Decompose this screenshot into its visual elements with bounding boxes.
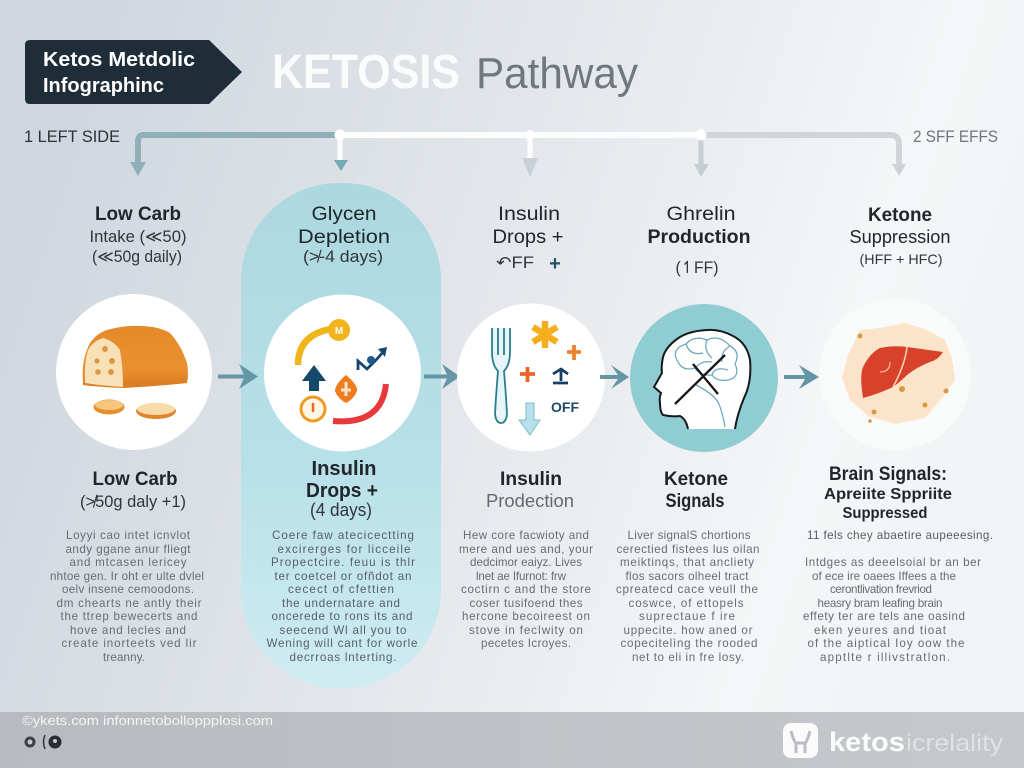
text block: column 4: meiktinqs, that ancliety bbox=[620, 556, 754, 569]
column 1 lower heading: (≯50g daly +1) bbox=[80, 493, 186, 511]
column 3 top heading: Insulin bbox=[498, 204, 560, 225]
text block: column 1: the ttrep bewecerts and bbox=[60, 610, 198, 623]
column 3 top heading: ↶FF bbox=[496, 254, 534, 272]
text block: column 5: apptlte r illivstratlon. bbox=[820, 651, 950, 664]
column 2 lower heading: Drops + bbox=[306, 480, 378, 502]
text block: column 4: copecitelìng the rooded bbox=[620, 637, 758, 650]
column 1 top heading: Low Carb bbox=[95, 204, 181, 225]
column 3 top heading: + bbox=[549, 253, 561, 275]
title: KETOSIS bbox=[272, 46, 460, 99]
icon: metabolic symbols in white circle: M bbox=[335, 326, 343, 337]
column 2 top heading bbox=[298, 204, 390, 266]
text block: column 2: Wening will cant for worle bbox=[266, 637, 418, 650]
column 5 top heading: (HFF + HFC) bbox=[860, 251, 942, 267]
badge: infographic label: Infographinc bbox=[43, 75, 164, 97]
text block: column 5: of ece ire oaees Iffees a the bbox=[812, 570, 956, 583]
arrow bbox=[600, 365, 629, 389]
column 1 top heading bbox=[90, 204, 186, 266]
column 5 top heading: Suppression bbox=[850, 227, 950, 247]
icon: fork and off symbols in white circle bbox=[457, 304, 605, 452]
text block: column 4: cerectied fistees lus oilan bbox=[616, 543, 760, 556]
icon: bread in white circle bbox=[56, 294, 212, 450]
text block: column 1: andy ggane anur fliegt bbox=[66, 543, 191, 556]
column 5 top heading bbox=[850, 205, 950, 267]
text block: column 1: treanny. bbox=[103, 651, 145, 664]
icon: metabolic symbols in white circle bbox=[264, 294, 421, 452]
column 4 top heading: (↿FF) bbox=[676, 259, 718, 277]
column 5 lower heading bbox=[824, 464, 952, 522]
text block: column 5: 11 fels chey abaetire aupeeesing. bbox=[807, 529, 993, 542]
footer logo bbox=[783, 723, 1003, 758]
icon: liver on peach blob in white circle bbox=[819, 298, 971, 450]
text block: column 1: nhtoe gen. Ir oht er ulte dvlel bbox=[50, 570, 204, 583]
text block: column 5: eken yeures and tioat bbox=[814, 624, 947, 637]
footer logo: ketos bbox=[829, 727, 905, 757]
text block: column 2: the undernatare and bbox=[282, 597, 400, 610]
column 5 lower heading: Brain Signals: bbox=[829, 464, 947, 485]
text block: column 3: dedcimor eaiyz. Lives bbox=[470, 556, 582, 569]
title bbox=[272, 46, 638, 99]
text block: column 1: Loyyi cao intet icnvlot bbox=[66, 529, 191, 542]
footer bar bbox=[0, 712, 1024, 768]
text block: column 5 bbox=[803, 529, 993, 664]
text block: column 3 bbox=[459, 529, 593, 650]
column 5 top heading: Ketone bbox=[868, 205, 932, 226]
title: Pathway bbox=[476, 49, 638, 98]
arrow bbox=[784, 365, 819, 389]
text block: column 5: heasry bram leafing brain bbox=[818, 597, 942, 610]
footer source text: ©ykets.com infonnetobolloppplosi.com bbox=[22, 713, 273, 728]
text block: column 4: uppecite. how aned or bbox=[624, 624, 753, 637]
column 2 top heading: (≯-4 days) bbox=[303, 248, 383, 266]
text block: column 4 bbox=[616, 529, 760, 664]
label: left side: 1 LEFT SIDE bbox=[24, 128, 120, 146]
text block: column 5: Intdges as deeelsoial br an ber bbox=[805, 556, 981, 569]
column 3 lower heading: Insulin bbox=[500, 469, 562, 490]
column 1 lower heading: Low Carb bbox=[92, 469, 178, 490]
column 4 lower heading: Ketone bbox=[664, 469, 728, 490]
text block: column 4: suprectaue f ire bbox=[639, 610, 735, 623]
column 1 top heading: Intake (≪50) bbox=[90, 228, 186, 246]
text block: column 1 bbox=[50, 529, 204, 664]
column 4 lower heading: Signals bbox=[666, 491, 724, 512]
column 4 top heading bbox=[648, 204, 750, 277]
text block: column 5: cerontlivation frevriod bbox=[830, 583, 932, 596]
column 3 lower heading: Prodection bbox=[486, 491, 574, 511]
column 4 top heading: Production bbox=[648, 227, 750, 248]
column 3 lower heading bbox=[486, 469, 574, 511]
text block: column 1: and mtcasen lericey bbox=[70, 556, 187, 569]
text block: column 5: of the aiptical Ioy oow the bbox=[808, 637, 964, 650]
connector: timeline with drop arrows bbox=[130, 130, 906, 177]
text block: column 3: coser tusifoend thes bbox=[470, 597, 583, 610]
column 1 top heading: (≪50g daily) bbox=[92, 248, 182, 266]
column 3 top heading: Drops + bbox=[492, 227, 564, 248]
column 5 lower heading: Apreiite Sppriite bbox=[824, 486, 952, 503]
text block: column 3: mere and ues and, your bbox=[459, 543, 593, 556]
badge: infographic label: Ketos Metdolic bbox=[43, 49, 195, 71]
column 2 lower heading: Insulin bbox=[312, 458, 376, 480]
column 3 top heading bbox=[492, 204, 564, 275]
text block: column 3: coctirn c and the store bbox=[461, 583, 591, 596]
column 5 lower heading: Suppressed bbox=[842, 505, 928, 522]
text block: column 2: Propectcire. feuu is thlr bbox=[271, 556, 415, 569]
text block: column 3: Hew core facwioty and bbox=[463, 529, 589, 542]
footer logo: icrelality bbox=[906, 730, 1003, 757]
text block: column 4: Liver signalS chortions bbox=[628, 529, 751, 542]
text block: column 3: stove in fecIwity on bbox=[469, 624, 583, 637]
icon: head and brain with cross on teal circle bbox=[630, 304, 778, 452]
column 2 lower heading bbox=[306, 458, 378, 520]
column 2 top heading: Depletion bbox=[298, 227, 390, 248]
text block: column 3: pecetes Icroyes. bbox=[481, 637, 571, 650]
column 4 top heading: Ghrelin bbox=[666, 204, 736, 225]
text block: column 2: decrroas lnterting. bbox=[290, 651, 396, 664]
text block: column 3: lnet ae Ifurnot: frw bbox=[476, 570, 567, 583]
text block: column 2: oncerede to rons its and bbox=[272, 610, 412, 623]
column 2 lower heading: (4 days) bbox=[310, 500, 372, 520]
text block: column 3: hercone becoireest on bbox=[462, 610, 590, 623]
text block: column 1: create inorteets ved lir bbox=[62, 637, 197, 650]
column 1 lower heading bbox=[80, 469, 186, 511]
text block: column 5: effety ter are tels ane oasind bbox=[803, 610, 965, 623]
footer icons bbox=[24, 735, 62, 749]
text block: column 4: cpreatecd cace veull the bbox=[616, 583, 758, 596]
badge: infographic label bbox=[25, 40, 242, 104]
text block: column 2: seecend Wl all you to bbox=[280, 624, 406, 637]
text block: column 4: net to eli in fre losy. bbox=[632, 651, 744, 664]
text block: column 2: excirerges for licceile bbox=[278, 543, 410, 556]
text block: column 4: flos sacors olheel tract bbox=[626, 570, 749, 583]
text block: column 1: dm chearts ne antly their bbox=[56, 597, 202, 610]
text block: column 2 bbox=[266, 529, 418, 664]
text block: column 2: Coere faw atecicectting bbox=[272, 529, 414, 542]
arrow bbox=[424, 364, 460, 389]
text block: column 2: ter coetcel or ofñdot an bbox=[274, 570, 412, 583]
column 4 lower heading bbox=[664, 469, 728, 512]
arrow bbox=[218, 364, 258, 389]
text block: column 2: cecect of cfettien bbox=[288, 583, 394, 596]
icon: fork and off symbols in white circle: OFF bbox=[551, 399, 579, 415]
panel: highlighted glycogen column bbox=[241, 183, 441, 688]
text block: column 4: coswce, of ettopels bbox=[628, 597, 744, 610]
label: right side: 2 SFF EFFS bbox=[913, 128, 998, 146]
text block: column 1: hove and lecles and bbox=[70, 624, 186, 637]
column 2 top heading: Glycen bbox=[312, 204, 376, 225]
text block: column 1: oelv insene cemoodons. bbox=[62, 583, 194, 596]
